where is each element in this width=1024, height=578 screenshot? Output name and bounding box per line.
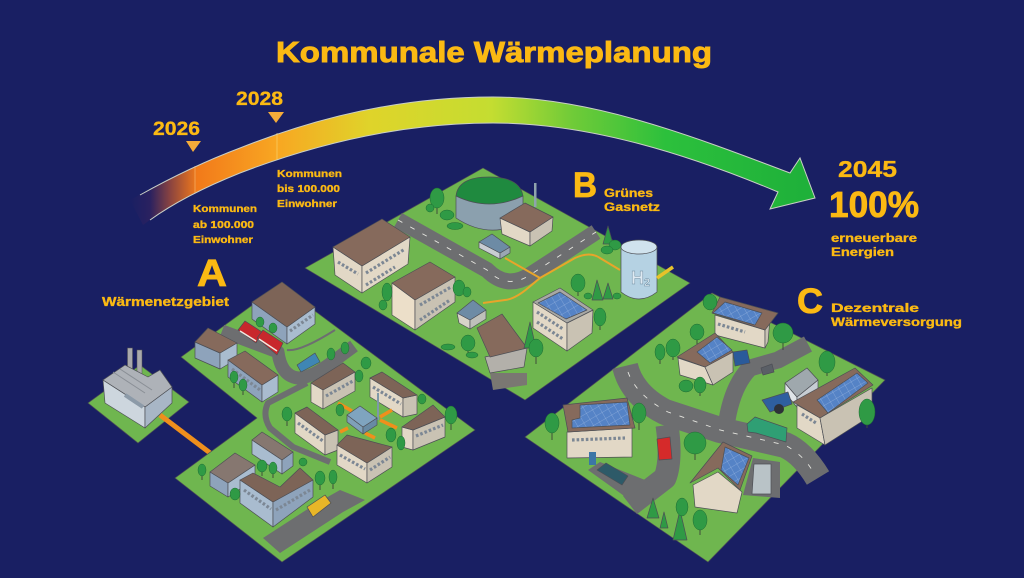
building A10	[252, 432, 293, 474]
text: Kommunen ab 100.000 Einwohner: Einwohner	[193, 234, 253, 246]
title: Kommunale Wärmeplanung	[276, 37, 712, 69]
panel: factory heat source	[88, 348, 189, 443]
text: Kommunen bis 100.000 Einwohner	[277, 168, 342, 210]
panel B label: Gasnetz	[604, 200, 660, 214]
panel B label	[573, 166, 660, 214]
road B	[398, 220, 596, 281]
car: dark	[597, 463, 628, 485]
panel C: decentralised heat supply	[525, 293, 885, 562]
house C3	[793, 368, 873, 445]
house C1	[712, 297, 778, 348]
building A5	[370, 372, 417, 417]
panel C label	[797, 282, 962, 329]
panel B label: B	[573, 166, 597, 205]
panel C label: Dezentrale	[831, 301, 919, 315]
vehicle: blue van	[733, 350, 750, 366]
trees A	[198, 317, 457, 500]
pipe: hydrogen outlet	[657, 267, 673, 278]
tractor: grey	[761, 364, 774, 375]
icon: factory chimneys	[128, 348, 142, 375]
panel A label: A	[197, 253, 227, 295]
tractor: blue	[762, 392, 792, 414]
truck: yellow	[307, 495, 331, 517]
building A11	[210, 453, 255, 497]
biogas digester	[456, 177, 536, 230]
marker 2026	[186, 141, 201, 152]
trees C	[545, 294, 875, 540]
text: Kommunen ab 100.000 Einwohner: ab 100.000	[193, 219, 254, 231]
building A7	[337, 435, 392, 483]
text: Kommunen ab 100.000 Einwohner: Kommunen	[193, 203, 257, 215]
marker 2028	[268, 112, 284, 123]
target 2045 block	[829, 156, 919, 259]
text: Kommunen bis 100.000 Einwohner: Einwohner	[277, 198, 337, 210]
roads in A	[222, 330, 365, 553]
text: Kommunen ab 100.000 Einwohner	[193, 203, 257, 246]
house C5	[690, 442, 752, 513]
timeline arrow	[130, 97, 815, 225]
building A4	[311, 363, 355, 409]
building B2	[392, 262, 455, 330]
building B5 with solar roof	[533, 288, 593, 351]
panel C label: C	[797, 282, 823, 321]
car: red	[657, 437, 672, 460]
building A8	[402, 405, 445, 450]
storage: blue	[589, 452, 596, 465]
building A6	[295, 407, 338, 455]
house C4	[563, 398, 635, 458]
text: Kommunen bis 100.000 Einwohner: Kommunen	[277, 168, 342, 180]
building B1	[333, 219, 410, 293]
target 2045 block: 2045	[838, 156, 897, 182]
gas pipeline	[483, 254, 620, 303]
truck: green	[747, 417, 787, 442]
small building B3	[457, 300, 486, 329]
house B4	[477, 314, 527, 390]
panel B label: Grünes	[604, 186, 653, 200]
icon: hydrogen tank: H	[631, 268, 644, 288]
panel B: green gas grid	[305, 168, 690, 400]
panel A: heat network district	[175, 282, 475, 562]
heat hub building	[347, 393, 378, 434]
target 2045 block: Energien	[831, 245, 894, 259]
car: blue	[297, 353, 320, 372]
pipe: factory to heat network	[160, 415, 222, 462]
car: silver	[752, 464, 771, 494]
garage C	[785, 368, 818, 407]
panel A label: Wärmenetzgebiet	[102, 295, 230, 309]
trees B	[379, 188, 621, 364]
building A1	[252, 282, 315, 344]
house C2	[677, 333, 733, 385]
building A2	[195, 328, 237, 369]
panel C label: Wärmeversorgung	[831, 315, 962, 329]
target 2045 block: erneuerbare	[831, 231, 917, 245]
building biogas plant	[500, 203, 553, 246]
heat pipes	[338, 403, 397, 438]
icon: hydrogen tank	[621, 240, 657, 299]
building A3	[228, 351, 278, 402]
building A12	[240, 468, 313, 527]
target 2045 block: 100%	[829, 184, 919, 225]
year label 2028: 2028	[236, 89, 283, 110]
train	[238, 321, 283, 355]
panel A label	[102, 253, 230, 309]
text: Kommunen bis 100.000 Einwohner: bis 100.000	[277, 183, 340, 195]
year label 2026: 2026	[153, 119, 200, 140]
small blue building	[479, 234, 510, 259]
icon: hydrogen tank: 2	[644, 277, 650, 289]
roads C	[588, 344, 818, 505]
